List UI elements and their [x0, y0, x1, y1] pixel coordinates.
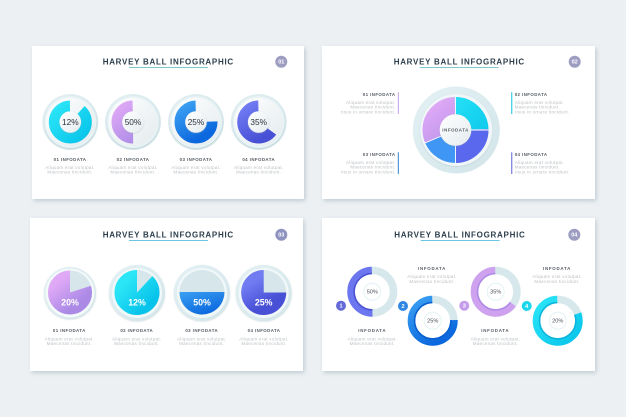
title: HARVEY BALL INFOGRAPHIC — [394, 57, 524, 66]
ball: 12%: 12% — [62, 117, 79, 127]
caption 02: 02 INFODATA — [120, 328, 153, 333]
caption 03: Aliquam erat volutpat. — [177, 336, 226, 342]
title underline — [129, 67, 208, 68]
ring: 35% — [474, 270, 517, 313]
caption 04: Maecenas tincidunt. — [241, 341, 287, 346]
callout 04: Maecenas tincidunt. — [515, 165, 560, 170]
ball: 35%: 35% — [250, 117, 268, 127]
callout 01: Aliquam erat volutpat. — [346, 100, 396, 105]
caption 04: 04 INFODATA — [248, 328, 281, 333]
ball: 50% — [174, 265, 230, 321]
caption below ring 3: INFODATA — [481, 328, 509, 333]
caption below ring 1: Aliquam erat volutpat. — [348, 336, 397, 342]
ball: 50% — [105, 94, 161, 150]
caption 04: Maecenas tincidunt. — [236, 170, 281, 175]
ball: 35% — [231, 94, 287, 150]
step badge 2: 2 — [401, 304, 405, 310]
ball: 25%: 25% — [188, 117, 205, 127]
ball: 12%: 12% — [128, 297, 146, 307]
step badge 3 — [459, 301, 469, 311]
callout 02: Maecenas tincidunt. — [515, 105, 560, 110]
ball: 50%: 50% — [125, 117, 142, 127]
number badge 04 — [568, 229, 580, 241]
caption 03: Maecenas tincidunt. — [173, 170, 219, 175]
caption 03: Aliquam erat volutpat. — [171, 165, 221, 170]
callout 02: risus in ornare tincidunt. — [515, 109, 569, 114]
ball: 25% — [236, 265, 292, 321]
callout 03: Aliquam erat volutpat. — [346, 160, 396, 165]
number badge 01: 01 — [278, 60, 284, 66]
caption 03: 03 INFODATA — [180, 157, 213, 162]
caption 03 — [177, 328, 226, 346]
callout 04: 04 INFODATA — [515, 152, 548, 157]
caption below ring 1: Maecenas tincidunt. — [350, 341, 395, 346]
ring: 50% — [351, 270, 393, 313]
number badge 02: 02 — [572, 60, 578, 66]
caption below ring 1 — [348, 328, 397, 346]
ring: 50%: 50% — [367, 290, 378, 296]
caption above ring 4: Maecenas tincidunt. — [534, 279, 580, 284]
caption 01 — [45, 328, 94, 346]
ball: 20%: 20% — [61, 297, 79, 307]
caption above ring 2: Aliquam erat volutpat. — [407, 274, 457, 279]
panel: 02 central ball — [322, 46, 595, 199]
panel: 03 pie harvey balls — [30, 218, 303, 371]
callout 01: 01 INFODATA — [363, 92, 396, 97]
callout 01: Maecenas tincidunt. — [350, 105, 396, 110]
caption below ring 1: INFODATA — [358, 328, 386, 333]
caption above ring 2: INFODATA — [418, 266, 446, 271]
ball: 20% — [44, 267, 96, 319]
number badge 02 — [569, 56, 581, 68]
title underline — [420, 67, 499, 68]
caption 03: Maecenas tincidunt. — [179, 341, 224, 346]
caption below ring 3: Maecenas tincidunt. — [473, 341, 518, 346]
caption 02: Maecenas tincidunt. — [110, 170, 156, 175]
caption 03: 03 INFODATA — [185, 328, 218, 333]
caption 01: Maecenas tincidunt. — [47, 170, 93, 175]
number badge 04: 04 — [571, 233, 578, 239]
callout 03: Maecenas tincidunt. — [350, 165, 396, 170]
step badge 2 — [398, 301, 408, 311]
step badge 1: 1 — [339, 304, 343, 310]
ring: 35%: 35% — [490, 290, 501, 296]
callout 03 — [341, 152, 399, 174]
callout 04 — [511, 152, 569, 174]
step badge 4 — [522, 301, 532, 311]
title: HARVEY BALL INFOGRAPHIC — [394, 230, 525, 239]
callout 02 — [511, 92, 569, 114]
caption 02: Aliquam erat volutpat. — [108, 165, 158, 170]
number badge 03 — [275, 229, 287, 241]
caption 01: Maecenas tincidunt. — [47, 341, 92, 346]
ball: 25%: 25% — [255, 297, 273, 307]
step badge 3: 3 — [463, 304, 466, 310]
central segmented ball — [413, 86, 500, 174]
ring: 20%: 20% — [552, 319, 563, 325]
callout 02: Aliquam erat volutpat. — [515, 100, 564, 105]
central segmented ball: INFODATA — [442, 128, 469, 133]
callout 04: risus in ornare tincidunt. — [515, 169, 569, 174]
ball: 50%: 50% — [193, 297, 211, 307]
callout 01: risus in ornare tincidunt. — [341, 109, 396, 114]
title underline — [421, 240, 500, 241]
ring: 25%: 25% — [427, 319, 438, 325]
number badge 01 — [275, 56, 287, 68]
callout 03: 03 INFODATA — [363, 152, 396, 157]
caption above ring 4 — [532, 266, 582, 284]
caption 01: 01 INFODATA — [54, 157, 87, 162]
panel: 04 ring harvey balls — [322, 218, 595, 371]
caption above ring 2 — [407, 266, 457, 284]
step badge 1 — [336, 301, 346, 311]
panel: 01 donut harvey balls — [32, 46, 304, 199]
caption below ring 3: Aliquam erat volutpat. — [471, 336, 520, 342]
callout 04: Aliquam erat volutpat. — [515, 160, 564, 165]
caption 02 — [112, 328, 161, 346]
step badge 4: 4 — [525, 304, 529, 310]
title underline — [129, 240, 208, 241]
title: HARVEY BALL INFOGRAPHIC — [103, 230, 233, 239]
ring: 25% — [412, 300, 454, 342]
caption 02: Maecenas tincidunt. — [114, 341, 159, 346]
caption 01: Aliquam erat volutpat. — [45, 336, 94, 342]
ring: 20% — [536, 300, 579, 342]
caption 04: 04 INFODATA — [242, 157, 275, 162]
caption above ring 4: INFODATA — [543, 266, 571, 271]
caption 01 — [45, 157, 95, 175]
caption above ring 4: Aliquam erat volutpat. — [532, 274, 582, 279]
caption 02: Aliquam erat volutpat. — [112, 336, 161, 342]
title: HARVEY BALL INFOGRAPHIC — [103, 57, 233, 66]
caption 04 — [234, 157, 283, 175]
caption 02: 02 INFODATA — [117, 157, 150, 162]
number badge 03: 03 — [278, 233, 284, 239]
ball: 25% — [168, 94, 224, 150]
ball: 12% — [109, 265, 165, 321]
caption below ring 3 — [471, 328, 520, 346]
callout 01 — [341, 92, 399, 114]
caption 01: 01 INFODATA — [53, 328, 86, 333]
caption above ring 2: Maecenas tincidunt. — [409, 279, 455, 284]
callout 03: risus in ornare tincidunt. — [341, 169, 396, 174]
caption 04 — [239, 328, 289, 346]
ball: 12% — [42, 94, 98, 150]
caption 04: Aliquam erat volutpat. — [239, 336, 289, 342]
callout 02: 02 INFODATA — [515, 92, 548, 97]
caption 03 — [171, 157, 221, 175]
caption 02 — [108, 157, 158, 175]
caption 04: Aliquam erat volutpat. — [234, 165, 283, 170]
caption 01: Aliquam erat volutpat. — [45, 165, 95, 170]
